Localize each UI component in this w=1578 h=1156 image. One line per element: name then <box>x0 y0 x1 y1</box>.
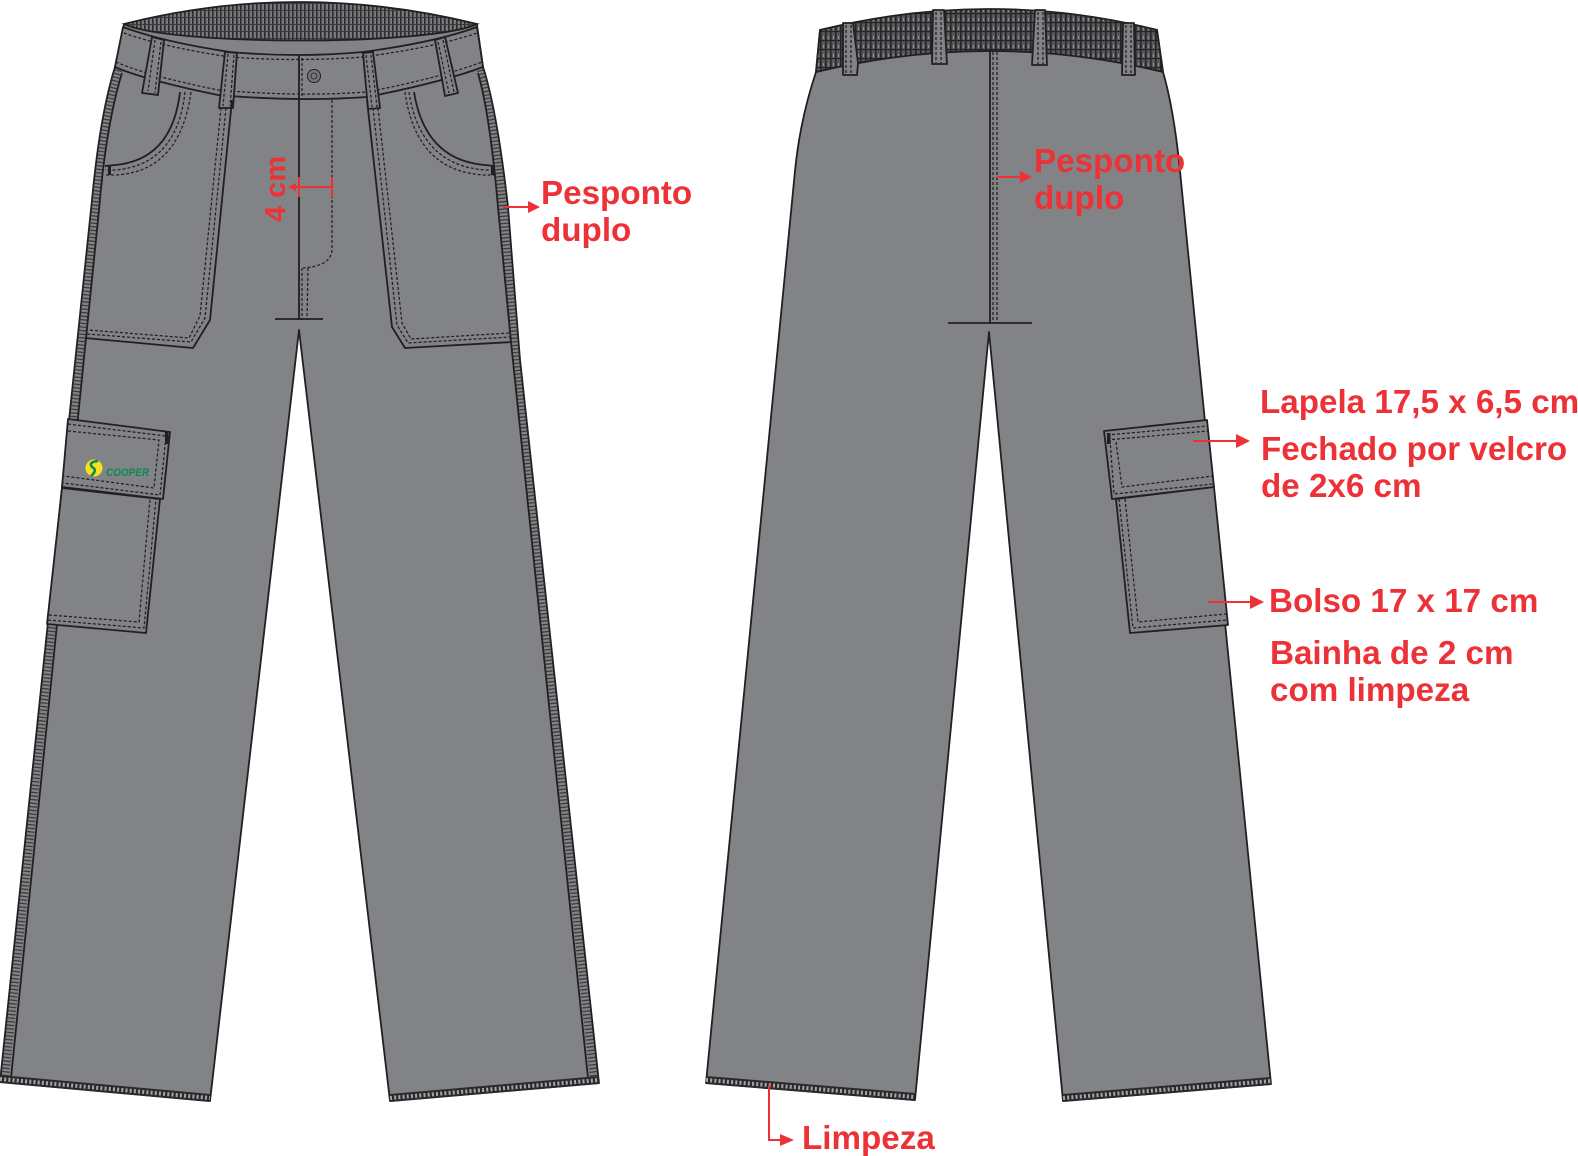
front hem <box>0 1079 599 1098</box>
front body outline <box>0 2 599 1101</box>
front left pocket opening <box>105 92 191 175</box>
back hem <box>706 1080 1271 1098</box>
label: Lapela: Lapela 17,5 x 6,5 cm <box>1260 384 1578 421</box>
label: Pesponto duplo (front): Pesponto <box>541 175 692 212</box>
label: Pesponto duplo (back): Pesponto <box>1034 143 1185 180</box>
label: Bainha: Bainha de 2 cm <box>1270 635 1513 672</box>
front waist ribbing <box>124 2 477 40</box>
label: Pesponto duplo (front): duplo <box>541 212 631 249</box>
arrow: back seam <box>996 171 1032 183</box>
back pocket flap <box>1104 420 1214 499</box>
front right pocket opening <box>405 92 495 175</box>
front button <box>308 70 320 82</box>
front side seams <box>5 70 594 1080</box>
label: Bolso: Bolso 17 x 17 cm <box>1269 583 1538 620</box>
back cargo pocket <box>1104 420 1228 633</box>
front fly <box>275 55 332 320</box>
front cargo pocket <box>47 419 170 633</box>
back body outline <box>706 10 1271 1101</box>
arrow: hem cleaning <box>769 1085 794 1146</box>
front pocket flap <box>62 419 170 499</box>
logo: Cooper: COOPER <box>106 467 149 479</box>
label: Pesponto duplo (front) <box>541 175 692 249</box>
arrow: flap <box>1193 434 1250 448</box>
label: Fechado por velcro <box>1261 431 1567 505</box>
label: 4 cm: 4 cm <box>260 156 292 222</box>
back waist ribbing <box>816 9 1163 72</box>
arrow: 4 cm measure <box>288 177 332 197</box>
label: Fechado por velcro: Fechado por velcro <box>1261 431 1567 468</box>
label: Limpeza: Limpeza <box>802 1120 935 1156</box>
label: Pesponto duplo (back): duplo <box>1034 180 1124 217</box>
back belt loops <box>843 10 1135 75</box>
front belt loops <box>142 37 458 109</box>
front waistband <box>115 27 483 99</box>
arrow: pocket <box>1208 595 1264 609</box>
front right panel seam <box>367 100 512 348</box>
label: Fechado por velcro: de 2x6 cm <box>1261 468 1422 505</box>
label: Pesponto duplo (back) <box>1034 143 1185 217</box>
logo: Cooper <box>86 460 149 479</box>
back center seam <box>948 50 1032 323</box>
arrow: front seam <box>503 201 540 213</box>
front pants <box>0 2 599 1101</box>
label: Bainha: com limpeza <box>1270 672 1470 709</box>
back pants <box>706 9 1271 1101</box>
front left panel seam <box>85 100 232 348</box>
label: Bainha <box>1270 635 1513 709</box>
